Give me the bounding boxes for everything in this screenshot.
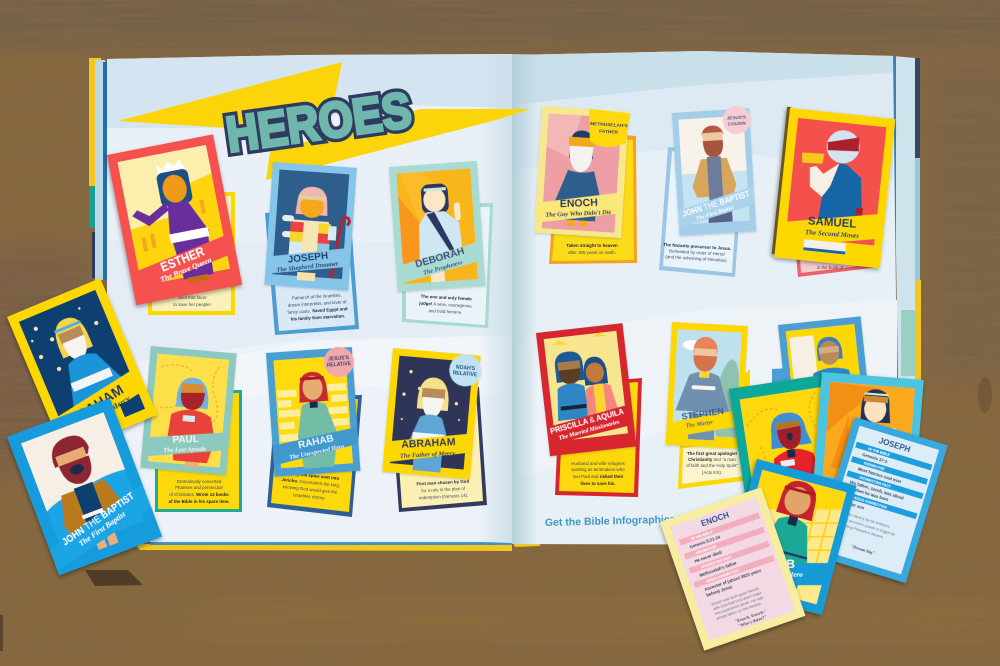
back panel: Enoch text: Taken straight to heaven (566, 243, 618, 248)
back panel: Joseph text: fancy coats. Saved Egypt and (287, 306, 348, 315)
card: Enoch info: INTERESTING FACT (700, 555, 733, 569)
back panel: Rahab text: Jericho. Outsmarted the king, (281, 477, 340, 488)
card: Enoch info (660, 487, 805, 651)
card: Enoch: The Guy Who Didn't Die (545, 209, 612, 219)
back panel: Stephen text: of faith and the Holy Spirit" (686, 463, 738, 468)
back panel: Stephen text (678, 369, 750, 489)
left page (107, 54, 512, 543)
card: Joseph info: "Dream big" (850, 543, 876, 556)
back panel: Joseph text: his family from starvation. (291, 313, 345, 322)
back panel: Stephen text: (Acts 6:5). (702, 470, 722, 475)
card: Joseph (264, 162, 357, 291)
card: Deborah: The Prophetess (422, 259, 464, 277)
card: Stephen: STEPHEN (681, 406, 724, 422)
card: Enoch info: JESUS CONNECTION (705, 568, 740, 584)
card: Enoch info: "Enoch, Enoch." (734, 608, 768, 624)
card: Esther: ESTHER (158, 243, 207, 275)
card: Joseph info: INTERESTING FACT (859, 476, 892, 489)
card: Deborah (389, 161, 486, 292)
card: Rahab: RELATIVE (327, 361, 352, 369)
back panel: Priscilla text: met Paul and risked their (573, 474, 624, 479)
card: John the Baptist (loose): JOHN THE BAPTIST (60, 491, 137, 548)
back panel: Joseph text: Patriarch of the Israelites, (292, 292, 342, 301)
back panel: Rahab text: Israelites victory. (293, 492, 326, 501)
card: Abraham: The Father of Mercy (400, 450, 456, 460)
card: Joseph info (813, 417, 948, 583)
card: Enoch info: Methuselah's father (699, 560, 738, 578)
card: John the Baptist: COUSIN (728, 120, 747, 127)
back panel: Priscilla text (555, 378, 642, 497)
back panel: Paul text (155, 390, 242, 512)
card: Enoch info: before) Jesus (706, 584, 734, 598)
card: Joseph info: he rose second in power in Egypt by (835, 515, 895, 537)
back panel: Abraham text: First man chosen by God (416, 479, 470, 486)
card: Abraham: ABRAHAM (401, 436, 456, 451)
card: Rahab (loose): The Unexpected Hero (739, 571, 803, 579)
small card back behind scribe hero (772, 368, 790, 385)
card: scribe hero (778, 316, 870, 415)
card: Enoch info: IN THE BIBLE (691, 530, 714, 541)
card: Enoch info: simply taken up into heaven. (716, 601, 763, 621)
back panel: Paul text: of Christians. Wrote 13 books (169, 492, 229, 497)
card: Deborah (loose) (813, 372, 924, 490)
card: Enoch info: Enoch was such good friends (711, 587, 759, 607)
back panel: John the Baptist text: The Nazarite precursor to Jesus. (663, 242, 731, 251)
card: Enoch (534, 106, 630, 238)
back panel: Esther text: to save her people! (173, 302, 211, 307)
card: Enoch info: KNOWN FOR (696, 544, 717, 555)
card: Enoch info: ENOCH (700, 510, 730, 528)
card: Rahab (loose) (722, 459, 856, 615)
card: Samuel (771, 107, 896, 268)
back panel: Stephen text: Christianity and "a man (688, 457, 736, 462)
card: Abraham (loose): ABRAHAM (57, 381, 126, 434)
card: Joseph info: JOSEPH (878, 436, 912, 454)
card: Esther: The Brave Queen (159, 255, 213, 284)
back panel: Deborah text: judge! A wise, courageous, (418, 301, 473, 308)
card: Joseph info: Genesis 37:3 (862, 452, 889, 464)
card: Joseph info: IN THE BIBLE (868, 447, 891, 457)
card: Abraham: NOAH'S (456, 365, 476, 372)
back panel: Priscilla text: working as tentmakers who (571, 467, 625, 472)
back panel: John the Baptist text (659, 147, 744, 277)
card: John the Baptist (672, 105, 757, 236)
card: Enoch: FATHER (599, 129, 619, 136)
back panel: Priscilla text: Husband and wife refugees (571, 461, 626, 466)
back panel: Enoch text: after 365 years on earth. (568, 250, 616, 255)
card: Joseph info: 91 when he was born (847, 485, 890, 502)
card: Stephen (666, 322, 748, 449)
card: Enoch info: Ancestor of (about 3820 years (704, 568, 762, 592)
card: Samuel: The Second Moses (805, 228, 859, 240)
card: Paul (140, 346, 237, 475)
card: Joseph info: Most famous coat ever (857, 466, 903, 484)
card: John the Baptist: The First Baptist (695, 205, 735, 222)
back panel: Priscilla text: lives to save his. (581, 481, 615, 486)
title: HEROES: HEROES (223, 82, 415, 163)
card: Rahab (266, 346, 361, 477)
back panel: Rahab text: Bravely hid spies sent into (284, 470, 340, 481)
card: Priscilla and Aquila: The Married Missionaries (558, 419, 621, 442)
card: Stephen: The Martyr (685, 420, 714, 429)
card: Abraham (loose): The Father of Mercy (69, 394, 132, 439)
back panel: Rahab text: knowing God would give the (282, 484, 338, 495)
card: Rahab: JESUS'S (328, 355, 350, 363)
card: Rahab: RAHAB (297, 433, 335, 451)
card: John the Baptist (loose) (7, 398, 162, 575)
back panel: Rahab text (267, 395, 362, 517)
card: Paul: PAUL (172, 434, 199, 446)
card: Deborah: DEBORAH (414, 246, 466, 270)
card: Samuel: SAMUEL (807, 215, 857, 231)
back panel: Samuel text: in the book of (817, 265, 844, 270)
card: John the Baptist: JESUS'S (727, 114, 746, 121)
card: Enoch info: "Who's there?" (737, 614, 768, 629)
back panel: Deborah text: The one and only female (421, 294, 473, 301)
back panel: Stephen text: The first great apologist (687, 451, 738, 456)
title: HEROES: HEROES (223, 82, 415, 163)
card: Enoch: METHUSELAH'S (590, 121, 629, 129)
card: Joseph info: KNOWN FOR (863, 461, 885, 471)
card: John the Baptist (loose): The First Baptist (77, 509, 128, 548)
card: Joseph info: JESUS CONNECTION (853, 496, 888, 510)
card: Rahab (loose): RAHAB (752, 557, 795, 571)
back panel: John the Baptist text: Beheaded by order of Herod (669, 248, 725, 257)
card: Joseph: The Shepherd Dreamer (276, 260, 339, 274)
book: covers and page edges (89, 56, 921, 551)
card: Paul (loose) (729, 375, 842, 522)
back panel: Joseph text: dream interpreter, and lover of (288, 299, 347, 308)
card: Rahab: The Unexpected Hero (289, 443, 345, 461)
card: Enoch info: with God that God didn't make (713, 591, 762, 611)
back panel: Paul text: of the Bible in his spare time. (168, 499, 230, 504)
back panel: Deborah text (402, 203, 493, 328)
card: Priscilla and Aquila: PRISCILLA & AQUILA (549, 407, 625, 436)
card: Abraham (loose) (7, 278, 157, 454)
link line: Get the Bible Infographics: Get the Bible Infographics Here (545, 513, 702, 529)
card: Priscilla and Aquila (536, 323, 636, 456)
card: Joseph: JOSEPH (287, 251, 329, 266)
card: Paul: The Lost Apostle (163, 446, 207, 454)
card: Joseph info: Foster son (843, 500, 865, 511)
back panel: Paul text: Dramatically converted (177, 479, 222, 484)
card: John the Baptist: JOHN THE BAPTIST (681, 188, 751, 219)
back panel: Esther text (148, 192, 235, 315)
back panel: Esther text: used that favor (177, 295, 207, 300)
card: Joseph info: His father, Jacob, was about (849, 479, 905, 501)
back panel: Abraham text (390, 387, 487, 512)
card: Enoch: ENOCH (560, 197, 598, 210)
back panel: Deborah text: and bold heroine. (428, 308, 463, 315)
card: Joseph info: interpreting Pharaoh's dreams. (834, 521, 884, 540)
back panel: Abraham text: for a role in the plan of (421, 486, 466, 493)
back panel: Samuel text (796, 255, 880, 277)
card: Esther (107, 134, 242, 305)
right page (512, 51, 897, 545)
back panel: John the Baptist text: (and the scheming of Herodias). (665, 254, 728, 263)
card: Enoch info: Genesis 5:21-24 (689, 534, 721, 550)
back panel: Paul text: Pharisee and persecutor (175, 485, 223, 490)
card: Enoch info: him experience death. He was (714, 596, 764, 616)
back panel: Enoch text (549, 130, 637, 264)
card: Abraham: RELATIVE (453, 370, 478, 378)
card: Enoch info: He never died! (694, 550, 723, 564)
card: Joseph info: Sold into slavery by his brothers, (837, 509, 891, 529)
title banner: yellow pennants (118, 62, 530, 180)
card: Abraham (382, 348, 483, 479)
back panel: Joseph text (265, 208, 359, 335)
back panel: Abraham text: redemption (Genesis 14). (419, 493, 468, 500)
